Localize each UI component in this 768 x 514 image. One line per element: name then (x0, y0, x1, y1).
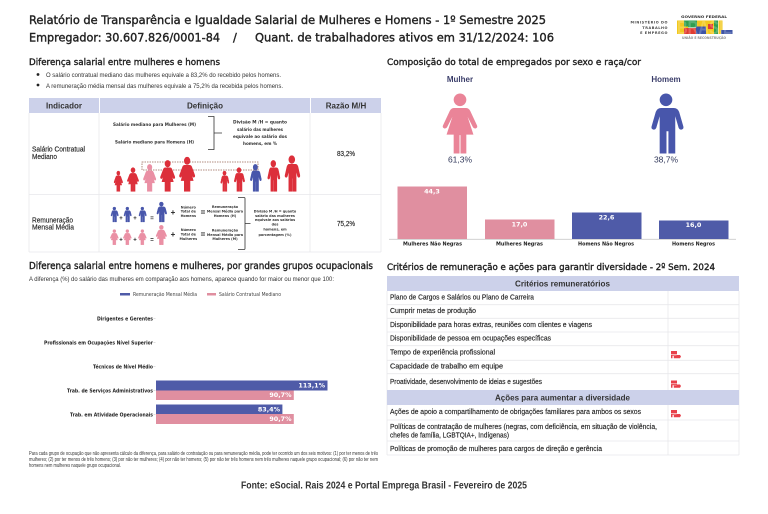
criteria rows: Tempo de experiência profissional (390, 350, 495, 356)
panel: tabela razão M/H (29, 98, 381, 252)
action rows (390, 409, 657, 453)
row: remuneração mensal média: = (150, 238, 154, 244)
row: remuneração mensal média: Número (181, 205, 197, 209)
heading: diferença salarial entre mulheres e homens: Diferença salarial entre mulheres e homens (29, 57, 220, 68)
bullet list: O salário contratual mediano das mulheres equivale a 83,2% do recebido pelos homens. (46, 72, 281, 79)
icon: mulher 61,3% (443, 75, 477, 164)
table header: ações para aumentar a diversidade: Ações para aumentar a diversidade (495, 394, 631, 402)
row: remuneração mensal média: Divisão M /H = quanto (254, 209, 297, 213)
text: nota de rodapé: homens nem mulheres naquele grupo ocupacional. (29, 463, 121, 469)
bar: homens não negros: Homens Não Negros (578, 242, 634, 248)
icon: marcador vermelho (671, 351, 681, 358)
row: salário contratual mediano: Salário Contratual (32, 147, 85, 154)
bullet list (37, 72, 283, 90)
row: salário contratual mediano: Mediano (32, 154, 57, 161)
chart legend (120, 291, 281, 298)
bars: trab. em atividade operacionais (156, 404, 294, 424)
bar: mulheres não negras: Mulheres Não Negras (403, 242, 462, 248)
row: remuneração mensal média: 75,2% (337, 221, 355, 228)
table header: Definição (187, 102, 223, 110)
row: remuneração mensal média: Remuneração (212, 205, 239, 209)
icon: homem 38,7% (651, 75, 683, 164)
bar chart: grupos ocupacionais: Trab. de Serviços Administrativos (67, 388, 153, 394)
logo: governo federal (630, 14, 732, 40)
bar chart: grupos ocupacionais: Profissionais em Ocupações Nível Superior (44, 340, 153, 346)
bar chart: grupos ocupacionais: Trab. em Atividade Operacionais (70, 412, 153, 418)
chart legend: Remuneração Mensal Média (133, 291, 197, 298)
row: remuneração mensal média: + (119, 216, 123, 222)
bar: homens negros: 16,0 (686, 221, 702, 229)
heading: critérios de remuneração: Critérios de remuneração e ações para garantir diversidade - 2º Sem. 2024 (387, 262, 715, 273)
bar: mulheres negras: 17,0 (512, 220, 528, 228)
bar: mulheres negras: Mulheres Negras (496, 242, 543, 248)
logo: governo federal: MINISTÉRIO DO (630, 20, 668, 24)
bar chart: composição por sexo e raça (389, 186, 736, 248)
logo: governo federal: UNIÃO E RECONSTRUÇÃO (682, 35, 726, 40)
table header: Indicador (46, 102, 82, 110)
table header (29, 98, 381, 113)
icon: mulher 61,3%: 61,3% (448, 154, 472, 164)
bars: trab. em atividade operacionais: 90,7% (269, 415, 292, 423)
row: remuneração mensal média: = (201, 230, 206, 239)
criteria rows: Capacidade de trabalho em equipe (390, 364, 503, 370)
criteria rows: Disponibilidade para horas extras, reuniões com clientes e viagens (390, 322, 592, 329)
row: remuneração mensal média (32, 198, 355, 250)
row: remuneração mensal média: porcentagem (%) (258, 233, 292, 237)
title: Relatório de Transparência e Igualdade Salarial de Mulheres e Homens - 1º Semestre 2025 (29, 13, 546, 27)
row: remuneração mensal média: Remuneração (212, 228, 239, 232)
action rows: chefes de família, LGBTQIA+, Indígenas) (390, 432, 509, 440)
row: salário contratual mediano (32, 116, 355, 191)
icon: homem 38,7%: 38,7% (654, 154, 678, 164)
text: nota de rodapé: Para cada grupo de ocupação que não apresenta cálculo da diferença, para salário de contratação ou para remuneração média, pode ter ocorrido um dos seis motivos: (1) por ter menos de três (29, 451, 378, 457)
row: salário contratual mediano: homens, em % (243, 141, 278, 147)
heading: composição do total de empregados: Composição do total de empregados por sexo e raça/cor (387, 57, 641, 68)
row: remuneração mensal média: Homens (181, 214, 196, 218)
bars: trab. de serviços administrativos: 113,1% (298, 382, 326, 390)
icon: marcador vermelho (671, 380, 681, 388)
logo: governo federal: E EMPREGO (640, 31, 668, 35)
row: remuneração mensal média: dos (272, 223, 278, 227)
panel: tabela de critérios e ações (387, 276, 739, 455)
bar: homens negros: Homens Negros (672, 242, 715, 248)
bar: homens negros (659, 220, 728, 248)
icon: marcador vermelho (671, 410, 681, 417)
row: remuneração mensal média: Mensal Média (32, 224, 74, 232)
row: remuneração mensal média: homens, em (263, 228, 287, 232)
icons: homens (111, 202, 167, 222)
row: salário contratual mediano: Divisão M /H = quanto (233, 120, 287, 126)
row: salário contratual mediano: Salário mediano para Mulheres (M) (113, 121, 196, 128)
text: descrição do gráfico: A diferença (%) do salário das mulheres em comparação aos homens, aparece quando for maior ou menor que 100: (29, 276, 334, 283)
row: remuneração mensal média: + (119, 238, 123, 244)
logo: governo federal: GOVERNO FEDERAL (681, 14, 728, 19)
row: remuneração mensal média: Número (181, 228, 197, 232)
bar: homens não negros: 22,6 (599, 214, 615, 222)
table header: ações para aumentar a diversidade (387, 390, 739, 405)
icons: pessoas ordenadas por salário (114, 156, 300, 191)
criteria rows (390, 294, 592, 386)
logo: governo federal: BRASIL (677, 18, 732, 38)
row: remuneração mensal média: Homens (H) (214, 214, 237, 218)
row: salário contratual mediano: Salário mediano para Homens (H) (115, 139, 194, 146)
row: remuneração mensal média: equivale aos salários (255, 218, 295, 222)
table header: Razão M/H (326, 102, 366, 110)
table header: critérios remuneratórios (387, 276, 739, 291)
row: remuneração mensal média: + (171, 208, 176, 217)
table header: critérios remuneratórios: Critérios remuneratórios (515, 280, 611, 288)
logo: governo federal: TRABALHO (642, 26, 668, 30)
title: / (233, 30, 237, 44)
action rows: Políticas de promoção de mulheres para cargos de direção e gerência (390, 446, 602, 453)
row: remuneração mensal média: + (171, 230, 176, 239)
row: remuneração mensal média: Mulheres (179, 237, 197, 241)
criteria rows: Proatividade, desenvolvimento de ideias e sugestões (390, 379, 542, 386)
bullet list: A remuneração média mensal das mulheres equivale a 75,2% da recebida pelos homens. (46, 83, 283, 90)
action rows: Políticas de contratação de mulheres (negras, com deficiência, em situação de violência, (390, 424, 657, 431)
row: remuneração mensal média: Remuneração (32, 218, 73, 224)
bars: trab. em atividade operacionais: 83,4% (258, 406, 281, 414)
heading: diferença salarial por grupos ocupacionais: Diferença salarial entre homens e mulheres, por grandes grupos ocupacionais (29, 261, 373, 272)
criteria rows: Cumprir metas de produção (390, 308, 476, 315)
icon: homem 38,7%: Homem (651, 75, 681, 84)
row: remuneração mensal média: = (201, 208, 206, 217)
text: nota de rodapé (29, 451, 378, 469)
criteria rows: Disponibilidade de pessoa em ocupações específicas (390, 336, 551, 342)
row: remuneração mensal média: + (133, 238, 137, 244)
icons: mulheres (110, 225, 167, 245)
bar: mulheres não negras (398, 186, 467, 248)
bar chart: grupos ocupacionais: Dirigentes e Gerentes (97, 316, 153, 322)
bars: trab. de serviços administrativos: 90,7% (269, 391, 292, 399)
row: salário contratual mediano: equivale ao salário dos (233, 133, 287, 140)
action rows: Ações de apoio a compartilhamento de obrigações familiares para ambos os sexos (390, 409, 641, 416)
row: remuneração mensal média: Total de (181, 232, 197, 236)
row: remuneração mensal média: Mulheres (M) (212, 237, 238, 241)
bar chart: grupos ocupacionais (44, 316, 328, 424)
row: salário contratual mediano: 83,2% (337, 151, 355, 158)
row: remuneração mensal média: Mensal Média para (207, 210, 244, 214)
row: remuneração mensal média: + (133, 216, 137, 222)
bar: mulheres não negras: 44,3 (424, 188, 440, 196)
chart legend: Salário Contratual Mediano (219, 291, 281, 298)
row: remuneração mensal média: Total de (181, 210, 197, 214)
row: remuneração mensal média: Mensal Média para (207, 233, 244, 237)
title: Quant. de trabalhadores ativos em 31/12/2024: 106 (255, 30, 554, 44)
row: salário contratual mediano: salário das mulheres (237, 126, 283, 133)
text: nota de rodapé: mulheres; (2) por ter menos de três homens; (3) por não ter mulheres; (4) por não ter homens; (5) por não ter três homens nem três mulheres naquele grupo ocupacional; (6) por não ter nem (29, 457, 378, 463)
icon: mulher 61,3%: Mulher (447, 75, 473, 84)
title (29, 13, 554, 44)
bars: trab. de serviços administrativos (156, 380, 328, 400)
footer: fonte: Fonte: eSocial. Rais 2024 e Portal Emprega Brasil - Fevereiro de 2025 (241, 480, 527, 492)
bar: homens não negros (572, 212, 642, 248)
row: remuneração mensal média: salário das mulheres (255, 214, 295, 218)
criteria rows: Plano de Cargos e Salários ou Plano de Carreira (390, 294, 534, 302)
title: Empregador: 30.607.826/0001-84 (29, 30, 220, 44)
bar chart: grupos ocupacionais: Técnicos de Nível Médio (93, 364, 153, 370)
bar: mulheres negras (485, 220, 554, 248)
row: remuneração mensal média: = (150, 216, 154, 222)
